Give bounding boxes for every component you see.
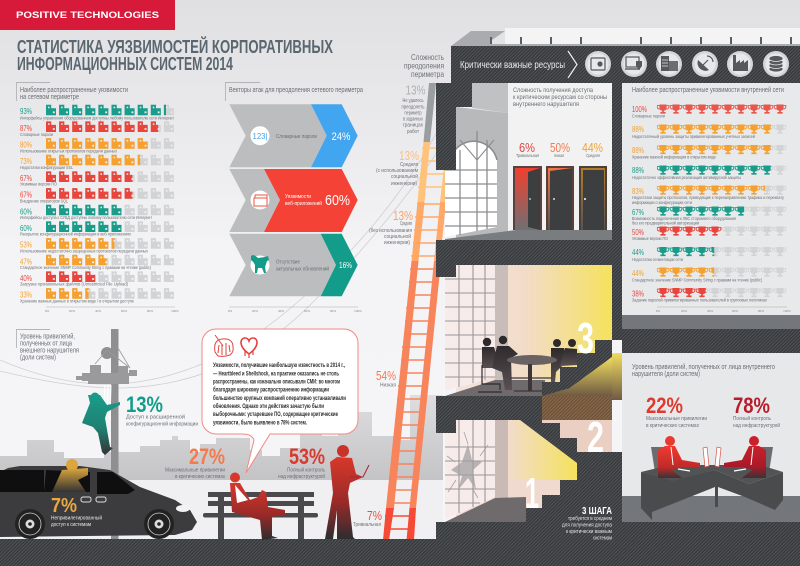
- label: 13% not overcome: преодолеть: [402, 104, 425, 110]
- left wall upper floor: [456, 83, 508, 238]
- door: 6% trivial: [513, 141, 542, 230]
- illustration: two people at desk: [641, 436, 783, 520]
- chevron: missing updates 16%: [229, 234, 358, 296]
- callout text: уязвимости, было выявлено в 78% систем.: [213, 418, 307, 426]
- label: 13% medium without social engineering: социальной: [384, 233, 411, 240]
- three steps note: к критически важным: [566, 529, 612, 535]
- logo banner: [0, 0, 175, 30]
- door: 50% low: 50%: [550, 141, 570, 155]
- label: 54% low: 54%: [376, 369, 396, 383]
- axis: internal chart: [656, 307, 791, 313]
- text: internal difficulty: [513, 87, 607, 108]
- label: 7% trivial: Тривиальная: [353, 522, 381, 528]
- label: 13% medium with social engineering: Средняя: [400, 162, 418, 168]
- stat: 7%: 7%: [51, 495, 77, 517]
- stat: 27%: Максимальные привилегии: [165, 468, 225, 474]
- panel: internal vulnerabilities: [622, 83, 800, 315]
- row 67% outdated software: Уязвимые версии ПО: [20, 182, 57, 186]
- row 40%: [20, 271, 174, 286]
- row 100%: [632, 104, 786, 118]
- row 53%: [20, 238, 174, 254]
- row 67% outdated software: [20, 171, 174, 186]
- title: СТАТИСТИКА УЯЗВИМОСТЕЙ КОРПОРАТИВНЫХ: [17, 36, 333, 57]
- row 67% outdated software: 67%: [20, 174, 32, 183]
- axis: perimeter chart: 80%: [147, 309, 153, 313]
- row 88% privileged accounts: [632, 124, 786, 139]
- row 93%: Интерфейсы управления оборудованием доступны любому пользователю сети Интернет: [20, 114, 175, 120]
- three steps note: для получения доступа: [562, 522, 612, 528]
- row 38%: 38%: [632, 290, 644, 298]
- wheel: front: [144, 509, 174, 539]
- row 40%: 40%: [20, 274, 32, 283]
- axis: internal chart: 40%: [707, 309, 713, 313]
- heading: perimeter vulnerabilities: [20, 86, 128, 101]
- label: 13% not overcome: 13%: [406, 82, 426, 98]
- row 67% SQL injection: 67%: [20, 190, 32, 200]
- axis: internal chart: 0%: [656, 309, 660, 313]
- chevron: dictionary passwords 24%: 24%: [332, 131, 351, 143]
- axis: perimeter chart: 60%: [121, 309, 127, 313]
- stat: 22%: в критических системах: [646, 423, 699, 429]
- heading: internal privileges: [632, 363, 775, 378]
- row 88% antivirus: 88%: [632, 166, 644, 175]
- axis: attack vectors: 20%: [252, 309, 258, 313]
- stat: 53%: Полный контроль: [287, 466, 325, 474]
- stat: 22%: [646, 393, 707, 429]
- panel: external attacker privileges heading: полученных от лица: [20, 340, 72, 348]
- chevron: web application vulnerabilities 60%: 60%: [325, 192, 350, 209]
- row 60% config disclosure: [20, 221, 174, 236]
- chevron: missing updates 16%: актуальных обновлений: [276, 266, 329, 272]
- middle floor window: [445, 265, 495, 391]
- row 73%: Недостатки конфигурации SSL: [20, 165, 73, 170]
- door: 44% medium: Средняя: [586, 153, 600, 158]
- stat: 27%: [165, 444, 225, 480]
- door: 50% low: [546, 141, 574, 230]
- middle floor room: [456, 265, 612, 396]
- row 83%: [632, 186, 786, 205]
- middle floor surface: [445, 380, 545, 396]
- climber figure: [82, 392, 120, 455]
- callout text: обновления. Однако эти действия зачастую были: [213, 402, 324, 410]
- label: 13% medium without social engineering: инженерии): [384, 240, 410, 246]
- stat: 78%: 78%: [733, 393, 770, 418]
- row 50%: Уязвимые версии ПО: [632, 236, 668, 241]
- row 88% privileged accounts: 88%: [632, 125, 644, 134]
- row 40%: Загрузка произвольных файлов (Unrestricted File Upload): [20, 280, 128, 286]
- heading: perimeter difficulty: Сложность: [411, 52, 444, 62]
- stat: 7%: Непривилегированный: [51, 514, 102, 522]
- panel: perimeter vulnerabilities: [16, 82, 179, 313]
- icon: factory: [727, 51, 753, 77]
- axis: perimeter chart: 40%: [95, 309, 101, 313]
- three steps note: 3 ШАГА: [582, 505, 612, 517]
- icon: monitor shield: [621, 51, 647, 77]
- door: 44% medium: [579, 141, 607, 230]
- stat: 7%: доступ к системам: [51, 522, 91, 528]
- three steps note: требуется в среднем: [568, 516, 612, 522]
- row 83%: информации о конфигурации сети: [632, 200, 692, 205]
- door: 6% trivial: 6%: [519, 141, 535, 155]
- step number 2: 2: [587, 413, 604, 462]
- car: [0, 459, 197, 539]
- broken window: [445, 420, 495, 520]
- axis: attack vectors: 60%: [304, 309, 310, 313]
- row 100%: Словарные пароли: [632, 114, 665, 118]
- chevron: web application vulnerabilities 60%: веб-приложений: [285, 200, 322, 207]
- stat: 53%: [278, 444, 325, 480]
- row 67%: без его предварительной авторизации: [632, 220, 699, 226]
- icon: office building: [656, 51, 682, 77]
- city skyline: [0, 395, 443, 539]
- label: 13% not overcome: [402, 82, 426, 135]
- stat: 22%: 22%: [646, 393, 683, 418]
- callout text: — Heartbleed и Shellshock, на практике оказались не столь: [213, 370, 339, 377]
- row 67%: Возможность подключения к ЛВС стороннего оборудования: [632, 216, 736, 221]
- axis: internal chart: 20%: [681, 309, 687, 313]
- label: 13% medium with social engineering: социальной: [391, 173, 418, 180]
- label: 13% not overcome: границах: [403, 122, 423, 128]
- panel: external attacker privileges heading: [16, 330, 79, 362]
- axis: internal chart: 80%: [758, 309, 764, 313]
- heading: perimeter difficulty: периметра: [411, 69, 444, 79]
- callout text: благодаря широкому распространению информации: [213, 386, 329, 394]
- stat: 7%: [51, 495, 102, 528]
- callout text: выборочными: устаревшее ПО, содержащее критические: [213, 410, 338, 418]
- perimeter difficulty labels: [353, 52, 444, 528]
- label: 13% medium with social engineering: инженерии): [391, 181, 417, 187]
- stat: 13% external: конфигурационной информации: [126, 420, 198, 428]
- row 38%: Задание паролей привилегированных пользователей в групповых политиках: [632, 296, 768, 302]
- sitting person: [230, 472, 285, 540]
- row 88% plaintext: Хранение важной информации в открытом виде: [632, 154, 716, 160]
- label: 13% not overcome: периметр: [404, 110, 422, 116]
- label: 13% medium without social engineering: 13%: [393, 208, 413, 223]
- label: 13% not overcome: в заданных: [403, 116, 423, 122]
- stat: 13% external: 13%: [126, 392, 163, 417]
- row 67%: 67%: [632, 208, 644, 217]
- row 100%: 100%: [632, 105, 647, 114]
- label: 13% medium without social engineering: [369, 208, 413, 246]
- row 47%: [20, 255, 174, 270]
- stat: 78%: Полный контроль: [733, 415, 771, 422]
- icon: safe: [585, 51, 611, 77]
- row 88% privileged accounts: Недостаточный уровень защиты привилегированных учетных записей: [632, 133, 755, 139]
- heading: perimeter difficulty: [404, 52, 444, 79]
- label: 13% not overcome: работ: [407, 129, 420, 135]
- row 60% DBMS interfaces: Интерфейсы доступа к СУБД доступны любому пользователю сети Интернет: [20, 214, 153, 220]
- axis: attack vectors: 0%: [228, 309, 232, 313]
- row 60% config disclosure: Раскрытие конфигурационной информации в веб-приложениях: [20, 230, 132, 236]
- row 47%: Стандартное значение SNMP Community String с правами на чтение (public): [20, 265, 151, 270]
- label: 54% low: Низкая: [380, 382, 396, 388]
- power lines: [0, 130, 445, 388]
- stat: 27%: 27%: [189, 444, 225, 469]
- row 53%: Использование недостаточно защищенных протоколов передачи данных: [20, 248, 149, 254]
- title: [17, 36, 333, 74]
- panel: external attacker privileges heading: Уровень привилегий,: [20, 332, 75, 340]
- row 33%: 33%: [20, 290, 32, 300]
- row 67% SQL injection: Внедрение операторов SQL: [20, 198, 68, 204]
- label: 13% medium without social engineering: (без использования: [369, 228, 412, 234]
- door: 6% trivial: Тривиальная: [516, 153, 539, 158]
- row 67% SQL injection: [20, 188, 174, 204]
- three steps note: системам: [593, 536, 612, 542]
- row 44% SNMP: 44%: [632, 269, 644, 278]
- row 50%: 50%: [632, 228, 644, 237]
- heading: internal privileges: нарушителя (доли систем): [632, 371, 700, 378]
- chevron: dictionary passwords 24%: Словарные пароли: [276, 134, 317, 140]
- hacker in car: [52, 459, 88, 492]
- stat: 27%: в критических системах: [175, 474, 225, 480]
- row 38%: [632, 288, 786, 302]
- row 80%: Использование открытых протоколов передачи данных: [20, 148, 118, 154]
- row 33%: Хранение важных данных в открытом виде / в открытом доступе: [20, 298, 134, 304]
- step number 3: 3: [577, 314, 594, 363]
- chevron: dictionary passwords 24%: [229, 104, 358, 167]
- label: 13% medium without social engineering: Средняя: [400, 221, 412, 227]
- row 44% SNMP: Стандартное значение SNMP Community String с правами на чтение (public): [632, 278, 762, 282]
- row 67%: [632, 206, 786, 226]
- heading: perimeter vulnerabilities: на сетевом периметре: [20, 94, 79, 101]
- stat: 13% external: Доступ к расширенной: [126, 414, 185, 420]
- row 53%: 53%: [20, 240, 32, 250]
- row 50%: [632, 226, 786, 241]
- axis: attack vectors: [228, 307, 362, 313]
- axis: internal chart: 100%: [783, 309, 791, 313]
- axis: perimeter chart: 0%: [45, 309, 49, 313]
- row 93%: [20, 105, 175, 120]
- wheel: rear: [15, 509, 45, 539]
- row 88% antivirus: Недостаточно эффективная реализация антивирусной защиты: [632, 174, 741, 180]
- axis: internal chart: 60%: [732, 309, 738, 313]
- row 87%: 87%: [20, 124, 32, 133]
- row 44% segmentation: [632, 247, 786, 262]
- chevron: web application vulnerabilities 60%: Уязвимости: [285, 194, 311, 200]
- row 88% antivirus: [632, 166, 786, 180]
- row 44% SNMP: [632, 268, 786, 282]
- speech bubble callout: [202, 329, 358, 473]
- lower floor room: [456, 420, 612, 522]
- axis: perimeter chart: 20%: [69, 309, 75, 313]
- callout text: большинство крупных компаний оперативно устанавливали: [213, 394, 346, 402]
- axis: attack vectors: 40%: [278, 309, 284, 313]
- upper floor wall: [456, 83, 612, 240]
- label: 7% trivial: 7%: [367, 509, 382, 523]
- axis: attack vectors: 80%: [330, 309, 336, 313]
- ladder: [383, 83, 452, 540]
- axis: perimeter chart: [45, 307, 179, 313]
- door: 44% medium: 44%: [582, 141, 603, 155]
- icon: heartbleed: [241, 338, 257, 358]
- under-stair glow: [542, 353, 622, 452]
- row 44% segmentation: 44%: [632, 248, 644, 257]
- text: internal difficulty: внутреннего нарушителя: [513, 101, 579, 108]
- step number 1: 1: [525, 469, 539, 518]
- stat: 53%: 53%: [289, 444, 325, 469]
- door: 50% low: Низкая: [554, 153, 564, 158]
- callout text: Уязвимости, получившие наибольшую известность в 2014 г.,: [213, 361, 345, 369]
- bench: [203, 492, 318, 539]
- label: 7% trivial: [353, 509, 382, 528]
- row 88% plaintext: 88%: [632, 146, 644, 155]
- chevron: missing updates 16%: Отсутствие: [276, 260, 300, 266]
- callout text: [213, 361, 346, 426]
- three steps note: [562, 505, 612, 542]
- text: internal difficulty: к критическим ресурсам со стороны: [513, 94, 607, 101]
- heading: perimeter difficulty: преодоления: [404, 60, 444, 70]
- stat: 53%: над инфраструктурой: [278, 473, 325, 480]
- arrow: chevron: [568, 51, 577, 78]
- lower floor surface: [445, 497, 526, 522]
- logo banner: POSITIVE TECHNOLOGIES: [16, 10, 159, 20]
- panel: attack vectors: [226, 82, 363, 313]
- utility pole: [76, 329, 137, 539]
- standing person with laptop: [325, 445, 369, 539]
- row 73%: 73%: [20, 157, 32, 166]
- heading: perimeter vulnerabilities: Наиболее распространенные уязвимости: [20, 86, 128, 94]
- label: 54% low: [376, 369, 396, 388]
- axis: perimeter chart: 100%: [171, 309, 179, 313]
- icon: coins: [763, 51, 789, 77]
- title: ИНФОРМАЦИОННЫХ СИСТЕМ 2014: [17, 53, 233, 74]
- label: 13% medium with social engineering: (с использованием: [376, 168, 418, 174]
- icon: satellite dish: [692, 51, 718, 77]
- row 83%: 83%: [632, 187, 644, 196]
- chevron: missing updates 16%: 16%: [339, 261, 352, 270]
- row 60% DBMS interfaces: 60%: [20, 208, 32, 216]
- panel: external attacker privileges heading: (доли систем): [20, 354, 56, 362]
- side gray floor and panel base: [622, 315, 800, 329]
- stat: 78%: [733, 393, 780, 429]
- stat: 13% external: [126, 392, 198, 428]
- header band: critical resources: [460, 51, 789, 78]
- panel: internal attacker privileges: [622, 353, 800, 522]
- meeting room people: [478, 336, 577, 392]
- label: 13% medium with social engineering: 13%: [399, 148, 419, 163]
- row 88% plaintext: [632, 145, 786, 160]
- row 47%: 47%: [20, 258, 32, 266]
- heading: attack vectors: Векторы атак для преодоления сетевого периметра: [229, 87, 363, 94]
- label: 13% medium with social engineering: [376, 148, 419, 187]
- panel: external attacker privileges heading: внешнего нарушителя: [20, 348, 79, 354]
- arched window: [445, 131, 497, 237]
- heading: critical resources: Критически важные ресурсы: [460, 59, 565, 71]
- icon: shellshock: [215, 335, 233, 356]
- row 44% segmentation: Недостатки сегментации сети: [632, 257, 683, 262]
- text: internal difficulty: Сложность получения доступа: [513, 87, 593, 94]
- row 93%: 93%: [20, 107, 32, 116]
- row 80%: 80%: [20, 140, 32, 150]
- chevron: dictionary passwords 24%: 123|: [252, 132, 268, 141]
- callout text: распространены, как изначально описывали СМИ: во многом: [213, 379, 340, 386]
- row 80%: [20, 138, 174, 154]
- row 87%: [20, 121, 174, 137]
- row 60% DBMS interfaces: [20, 205, 174, 220]
- axis: attack vectors: 100%: [354, 309, 362, 313]
- chevron: web application vulnerabilities 60%: [229, 169, 358, 232]
- upper floor surface: [445, 230, 612, 240]
- row 87%: Словарные пароли: [20, 132, 53, 137]
- row 33%: [20, 288, 174, 304]
- row 73%: [20, 155, 174, 170]
- row 60% config disclosure: 60%: [20, 224, 32, 233]
- roof: [451, 23, 800, 46]
- stat: 78%: над инфраструктурой: [733, 422, 780, 429]
- label: 13% not overcome: Не удалось: [402, 98, 424, 104]
- stat: 22%: Максимальные привилегии: [646, 416, 707, 422]
